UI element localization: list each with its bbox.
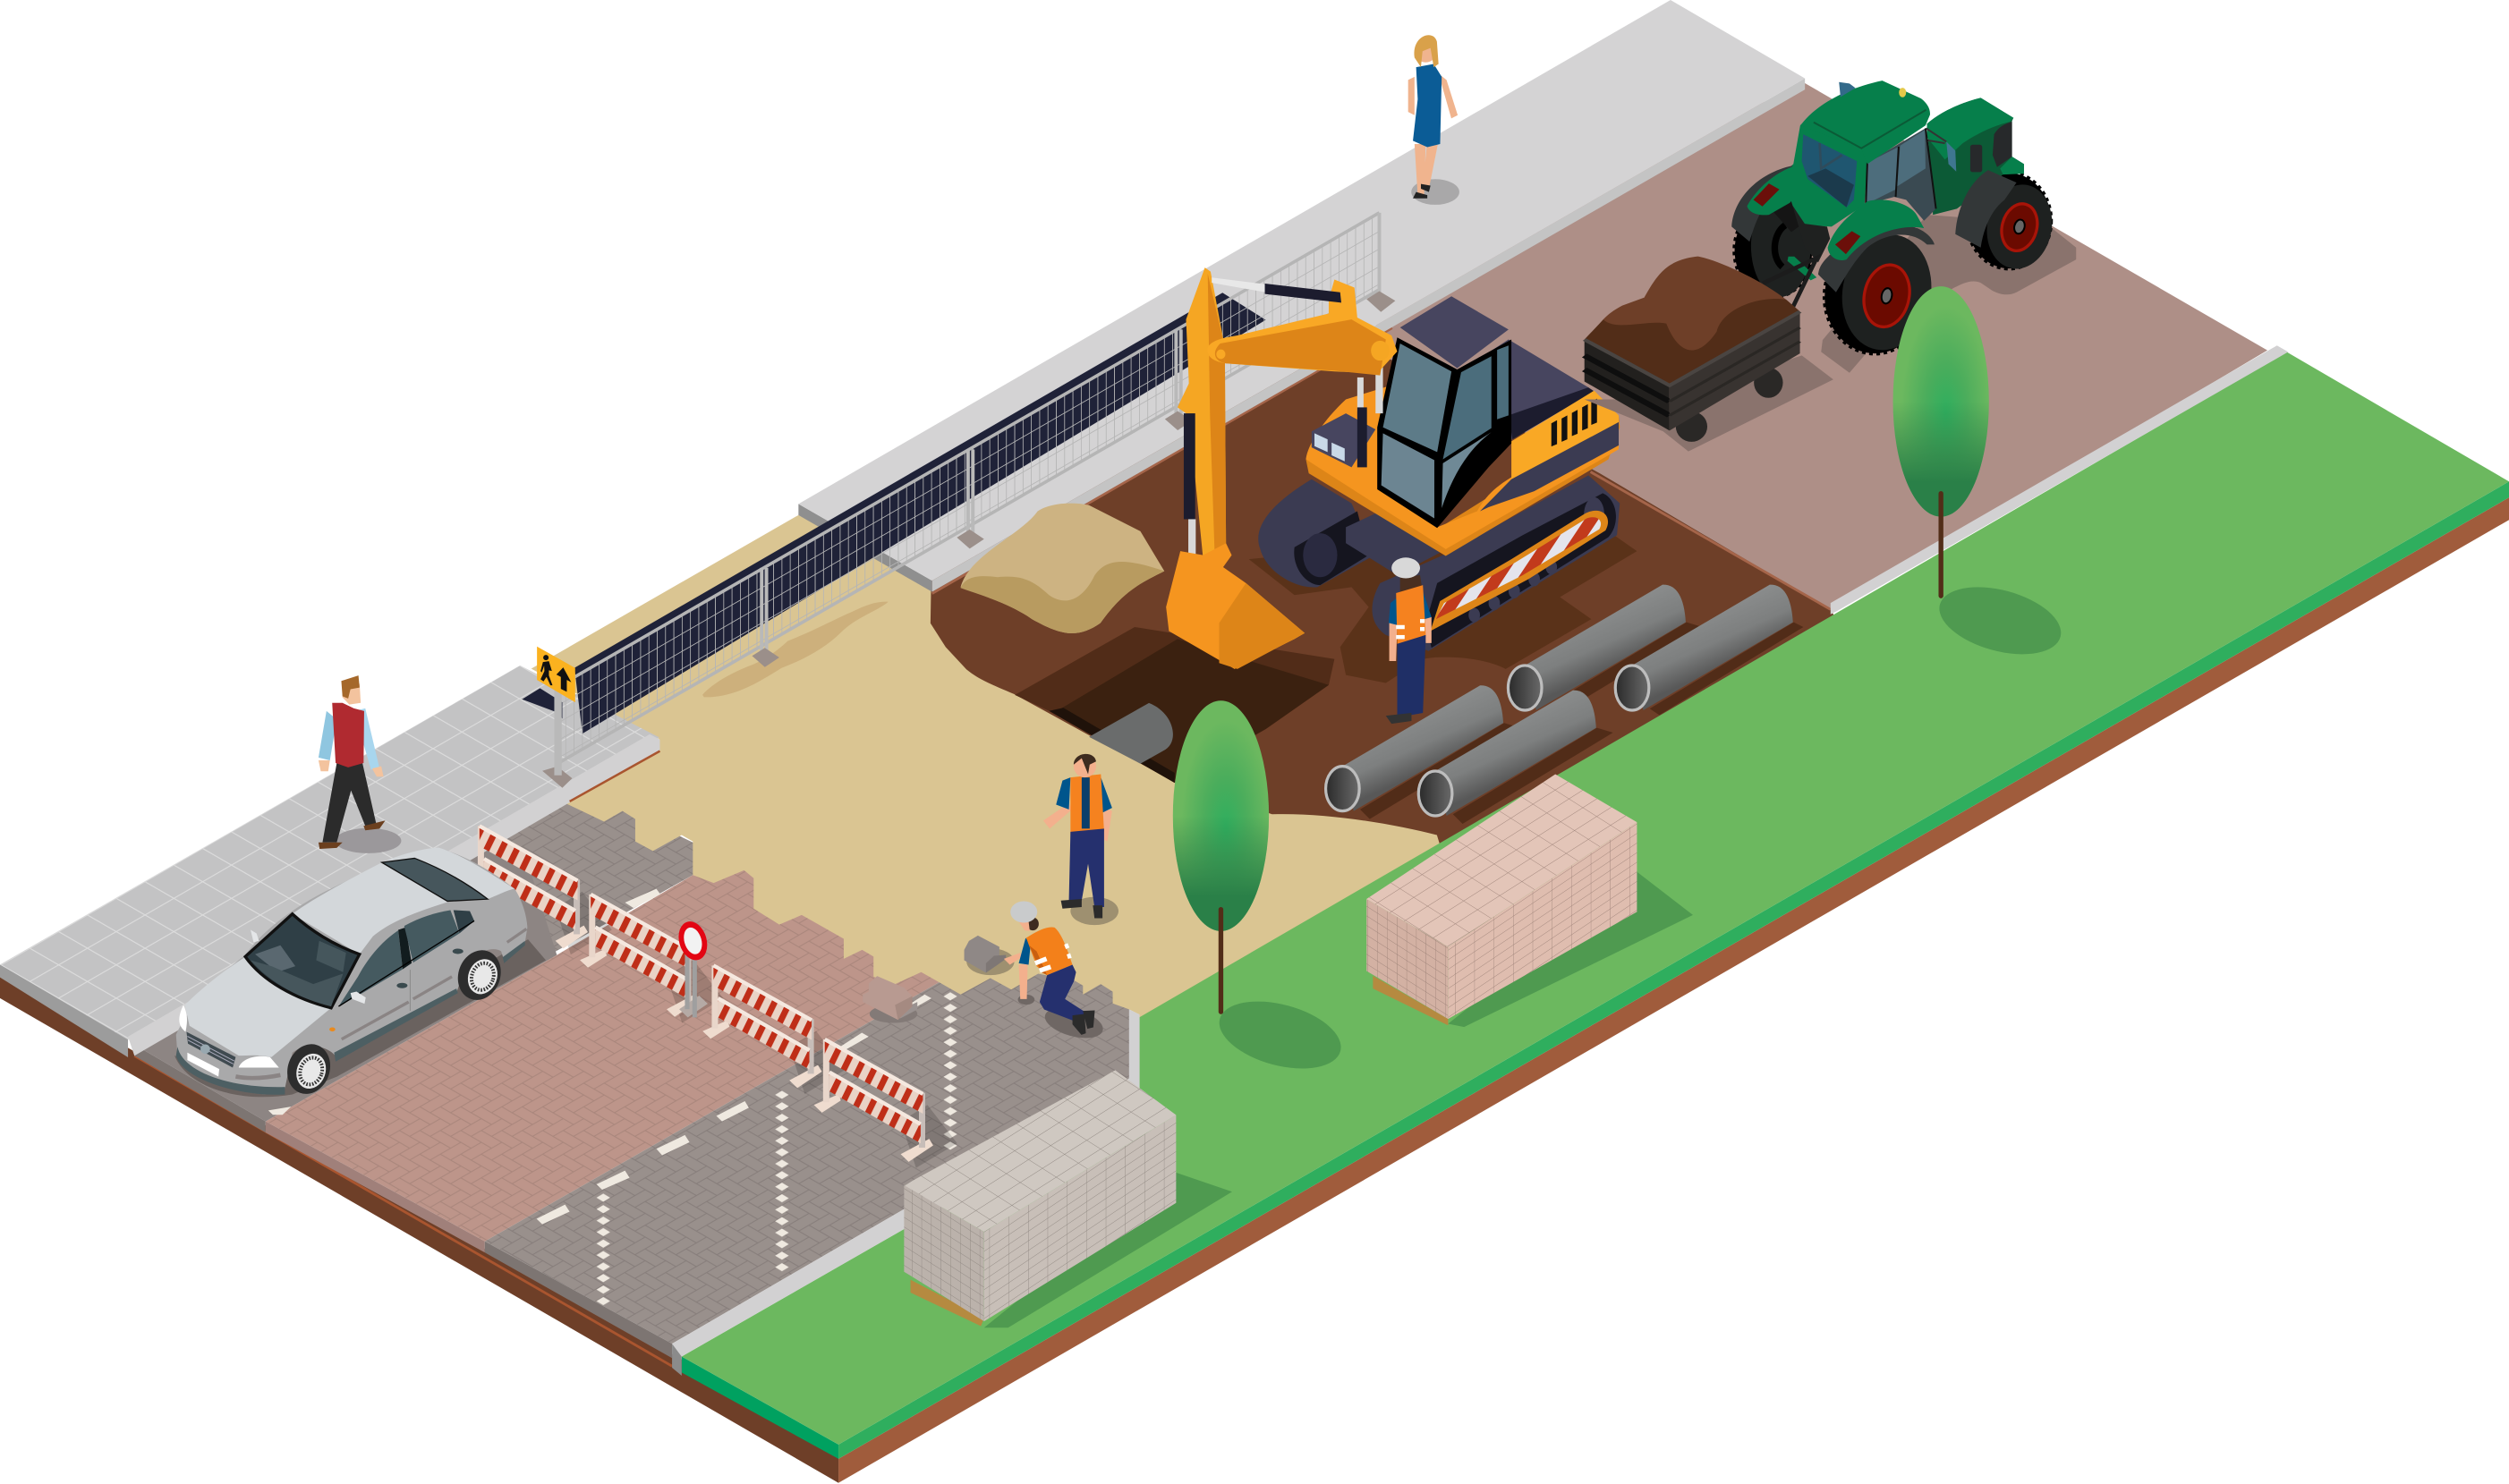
soil trailer	[1585, 257, 1833, 452]
right rear wheel	[1968, 173, 2059, 274]
sand pile, excavator and worker layer	[961, 267, 1637, 783]
left fender	[1731, 165, 1807, 242]
walking man	[319, 675, 401, 853]
car skirts	[176, 941, 525, 1095]
sand pile	[961, 504, 1164, 633]
dotted road line B	[775, 1090, 789, 1274]
dotted road line C	[943, 992, 957, 1152]
worker by pipes	[1386, 557, 1432, 724]
tractor shadow	[1821, 215, 2076, 373]
bucket cylinder	[1184, 413, 1195, 607]
back sidewalk	[798, 0, 1805, 592]
light box	[1312, 413, 1375, 467]
far wheel	[1735, 195, 1812, 297]
tractor	[1731, 81, 2076, 373]
woman on sidewalk	[1408, 35, 1459, 205]
back fence	[558, 213, 1395, 763]
car ground shadow	[174, 939, 546, 1097]
pink back road	[1376, 83, 2267, 609]
sand shadow by fence	[702, 602, 889, 697]
track stripe panel	[1431, 511, 1608, 631]
green lawn with edge layers	[672, 345, 2509, 1459]
barrier 4	[814, 1039, 957, 1168]
pink brick paving	[266, 848, 940, 1242]
near track	[1372, 475, 1620, 651]
dirt shadow around excavator	[1249, 519, 1637, 683]
paving stone pallet: gray	[904, 1070, 1232, 1327]
tree 1 shadow	[1212, 989, 1348, 1081]
car rear wheel	[451, 945, 507, 1006]
near fender	[1818, 199, 1935, 293]
pink brick stack	[863, 976, 917, 1022]
road parking strip	[134, 848, 557, 1122]
pedestrian sign	[522, 647, 575, 788]
soil layer	[0, 497, 2509, 1483]
excavation dirt	[931, 349, 1848, 872]
worker standing on sand	[1043, 754, 1118, 925]
paving stone pallet: pink	[1366, 775, 1693, 1027]
dotted road line A	[596, 1193, 611, 1308]
cab	[1377, 296, 1511, 528]
road markings	[268, 889, 957, 1308]
windshield	[245, 914, 360, 1008]
roof	[293, 862, 447, 954]
car trim	[235, 929, 526, 1078]
kneeling worker and brick stacks	[863, 901, 1106, 1044]
dipper arm	[1178, 267, 1226, 559]
engine hood	[1926, 98, 2024, 215]
tree 2	[1893, 286, 1989, 598]
rear deck	[1466, 339, 1588, 439]
no-entry sign	[675, 919, 711, 1017]
car front wheel	[280, 1039, 337, 1100]
barrier 2	[580, 895, 723, 1023]
arm cylinder	[1212, 277, 1341, 302]
barrier 1	[469, 826, 612, 954]
trench	[1015, 627, 1334, 783]
bucket	[1166, 543, 1305, 669]
chassis	[1346, 512, 1443, 575]
upper body	[1306, 384, 1620, 556]
cab	[1748, 81, 1936, 226]
sand area	[532, 515, 1448, 1031]
hitch bars	[1763, 258, 1816, 307]
tiled sidewalk	[0, 666, 659, 1057]
dirt edge lines	[932, 328, 1831, 609]
trailer shadow	[1585, 355, 1833, 452]
hood	[185, 957, 331, 1057]
boom cylinders	[1357, 358, 1383, 467]
kneeling worker	[1004, 901, 1106, 1044]
gray upper road paving	[496, 784, 704, 954]
gray car	[174, 847, 546, 1100]
front engine block	[1773, 190, 1830, 280]
headlights	[179, 1005, 279, 1067]
gray mesh	[558, 213, 1379, 763]
side windows	[338, 910, 474, 1006]
rear window	[382, 858, 488, 901]
rear deck	[382, 847, 515, 899]
road dashes	[268, 889, 931, 1225]
pipes on site	[1326, 585, 1803, 824]
barriers, no-entry sign and pedestrian layer	[319, 675, 957, 1168]
grille and plate	[186, 1031, 235, 1076]
barrier 3	[702, 965, 846, 1094]
right fender	[1955, 170, 2017, 248]
tree 1	[1173, 700, 1269, 1014]
far track	[1258, 479, 1374, 588]
navy fence screen	[574, 293, 1266, 734]
near rear wheel	[1824, 227, 1940, 357]
main boom	[1207, 280, 1398, 376]
gray lower road paving	[485, 944, 1130, 1344]
tree 2 shadow	[1932, 575, 2068, 666]
road side faces	[134, 1045, 672, 1358]
car body	[176, 848, 527, 1094]
excavator	[1166, 267, 1620, 669]
gray brick stack	[965, 936, 1015, 975]
buried pipe	[1089, 703, 1173, 764]
